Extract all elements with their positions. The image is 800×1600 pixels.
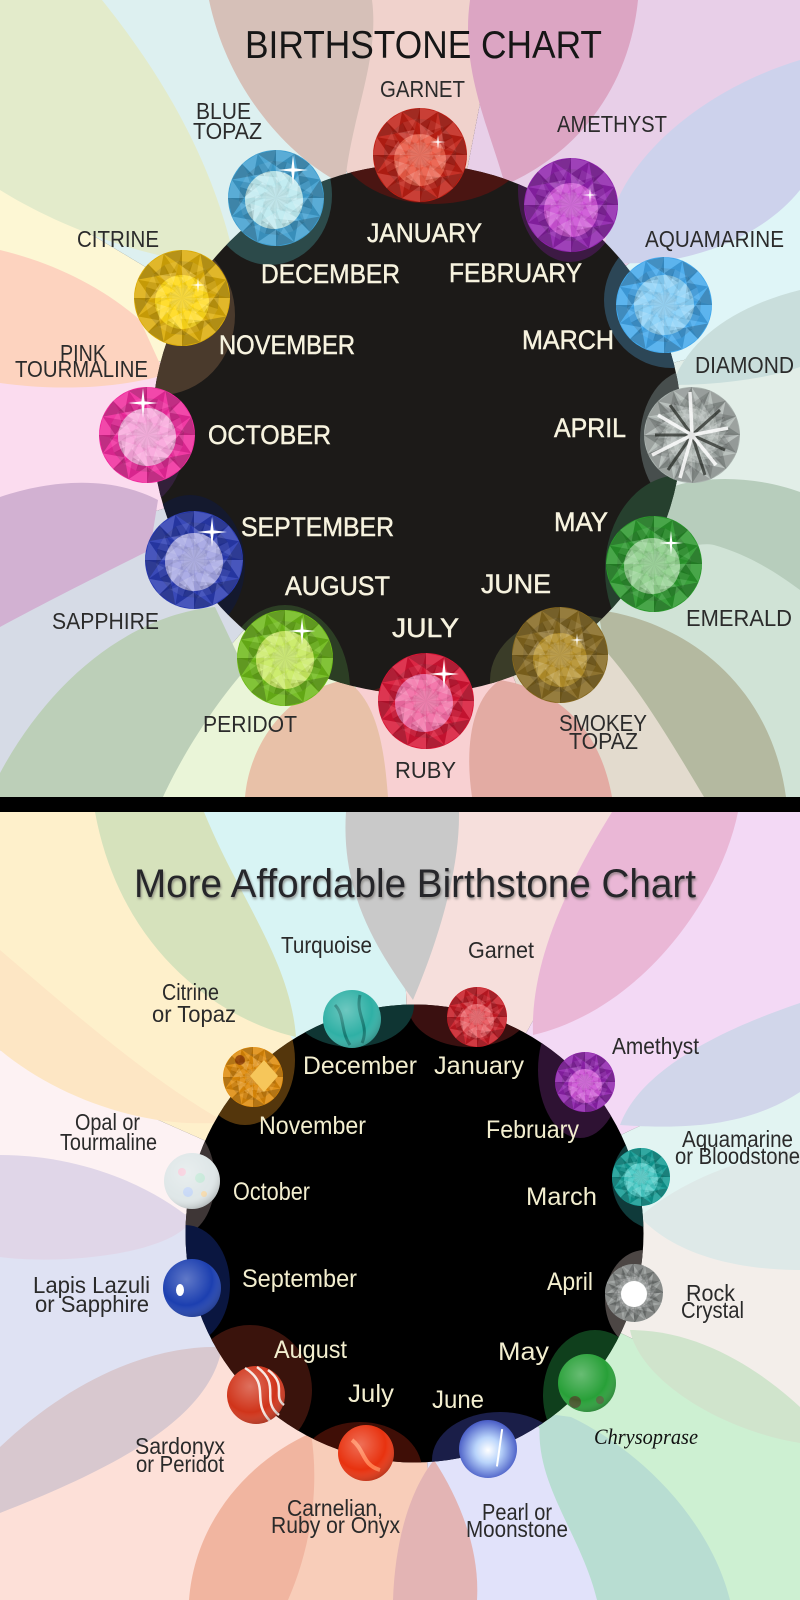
title: More Affordable Birthstone Chart: More Affordable Birthstone Chart: [135, 864, 697, 908]
month: December: December: [303, 1052, 417, 1080]
month: November: November: [259, 1112, 366, 1140]
label: pink tourmaline: TOURMALINE: [15, 356, 148, 382]
gem: citrine: [124, 240, 240, 356]
panel: affordable chart background: [0, 812, 800, 1600]
label: aquamarine: AQUAMARINE: [645, 226, 784, 252]
label: smokey topaz: [559, 710, 647, 754]
label: lapis lazuli or sapphire: or Sapphire: [35, 1291, 149, 1317]
label: opal or tourmaline: Opal or: [75, 1109, 140, 1135]
label: sardonyx or peridot: or Peridot: [136, 1451, 225, 1477]
gem: pink tourmaline: [89, 377, 205, 493]
month: July: JULY: [392, 613, 459, 643]
month: December: DECEMBER: [261, 259, 400, 289]
label: opal or tourmaline: Tourmaline: [60, 1129, 157, 1155]
label: citrine or topaz: Citrine: [162, 979, 219, 1005]
label: sardonyx or peridot: Sardonyx: [135, 1433, 225, 1459]
gem: turquoise: [323, 990, 381, 1048]
month: April: April: [547, 1268, 593, 1296]
gem: garnet: [364, 99, 476, 211]
gem: diamond: [617, 360, 767, 510]
label: lapis lazuli or sapphire: Lapis Lazuli: [33, 1272, 150, 1298]
month: September: September: [242, 1265, 357, 1293]
panel: birthstone chart background: [0, 0, 800, 797]
month: August: August: [274, 1336, 347, 1364]
label: smokey topaz: TOPAZ: [569, 728, 638, 754]
month: November: NOVEMBER: [219, 330, 355, 360]
gem: aquamarine: [606, 247, 722, 363]
label: blue topaz: [193, 98, 262, 144]
label: sapphire: SAPPHIRE: [52, 608, 159, 634]
gem: aquamarine or bloodstone: [606, 1142, 676, 1212]
month: August: AUGUST: [285, 571, 390, 601]
label: citrine or topaz: or Topaz: [152, 1001, 236, 1027]
gem: amethyst: [515, 149, 627, 261]
gem: opal: [164, 1153, 220, 1209]
label: citrine: CITRINE: [77, 226, 159, 252]
label: pink tourmaline: PINK: [60, 340, 107, 366]
dark centre disc: top chart: [155, 167, 679, 692]
gem: blue topaz: [218, 140, 334, 256]
gem: emerald: [596, 506, 712, 622]
label: rock crystal: [681, 1280, 744, 1323]
label: ruby: RUBY: [395, 757, 456, 783]
month: May: May: [498, 1338, 550, 1366]
gem: citrine or topaz: [217, 1041, 289, 1113]
month: March: MARCH: [522, 325, 614, 355]
dark centre disc: bottom chart: [186, 1004, 644, 1462]
label: pearl or moonstone: [466, 1499, 568, 1542]
month: May: MAY: [554, 507, 608, 537]
label: turquoise: Turquoise: [281, 932, 372, 958]
label: pearl or moonstone: Pearl or: [482, 1499, 552, 1525]
gem: smokey topaz: [502, 597, 618, 713]
gem: rock crystal: [589, 1248, 679, 1338]
label: peridot: PERIDOT: [203, 711, 297, 737]
label: chrysoprase: Chrysoprase: [594, 1424, 698, 1449]
gem: peridot: [227, 600, 343, 716]
month: June: JUNE: [481, 569, 551, 599]
label: garnet: GARNET: [380, 76, 465, 102]
label: carnelian, ruby or onyx: [271, 1495, 400, 1538]
gem: lapis lazuli: [163, 1259, 221, 1317]
month: October: OCTOBER: [208, 420, 331, 450]
month: October: October: [233, 1178, 310, 1206]
gem: sapphire: [135, 501, 253, 619]
month: September: SEPTEMBER: [241, 512, 394, 542]
label: amethyst: Amethyst: [612, 1033, 700, 1059]
label: pink tourmaline: [15, 340, 148, 382]
label: emerald: EMERALD: [686, 605, 792, 631]
label: rock crystal: Rock: [686, 1280, 735, 1306]
label: citrine or topaz: [152, 979, 236, 1027]
title: Birthstone Chart: BIRTHSTONE CHART: [245, 24, 602, 67]
gem: chrysoprase: [558, 1354, 616, 1412]
label: pearl or moonstone: Moonstone: [466, 1516, 568, 1542]
label: garnet: Garnet: [468, 937, 535, 963]
label: amethyst: AMETHYST: [557, 111, 667, 137]
label: rock crystal: Crystal: [681, 1297, 744, 1323]
month: February: FEBRUARY: [449, 258, 582, 288]
label: blue topaz: TOPAZ: [193, 118, 262, 144]
label: opal or tourmaline: [60, 1109, 157, 1155]
month: January: January: [434, 1052, 524, 1080]
month: January: JANUARY: [367, 218, 482, 248]
label: carnelian, ruby or onyx: Carnelian,: [287, 1495, 383, 1521]
label: lapis lazuli or sapphire: [33, 1272, 150, 1317]
label: aquamarine or bloodstone: [675, 1126, 800, 1169]
gem: garnet small: [441, 981, 513, 1053]
label: smokey topaz: SMOKEY: [559, 710, 647, 736]
label: carnelian, ruby or onyx: Ruby or Onyx: [271, 1512, 400, 1538]
divider bar: [0, 797, 800, 812]
month: April: APRIL: [554, 413, 626, 443]
month: July: July: [348, 1380, 395, 1408]
gem: sardonyx: [227, 1366, 285, 1424]
label: sardonyx or peridot: [135, 1433, 225, 1477]
gem: ruby: [368, 643, 484, 759]
gem: amethyst small: [549, 1046, 621, 1118]
gem: pearl or moonstone: [459, 1420, 517, 1478]
month: June: June: [432, 1386, 484, 1414]
title: More Affordable Birthstone Chart: More Affordable Birthstone Chart: [134, 862, 696, 906]
month: March: March: [526, 1183, 597, 1211]
gem: carnelian: [338, 1425, 394, 1481]
month: February: February: [486, 1116, 579, 1144]
label: blue topaz: BLUE: [196, 98, 251, 124]
